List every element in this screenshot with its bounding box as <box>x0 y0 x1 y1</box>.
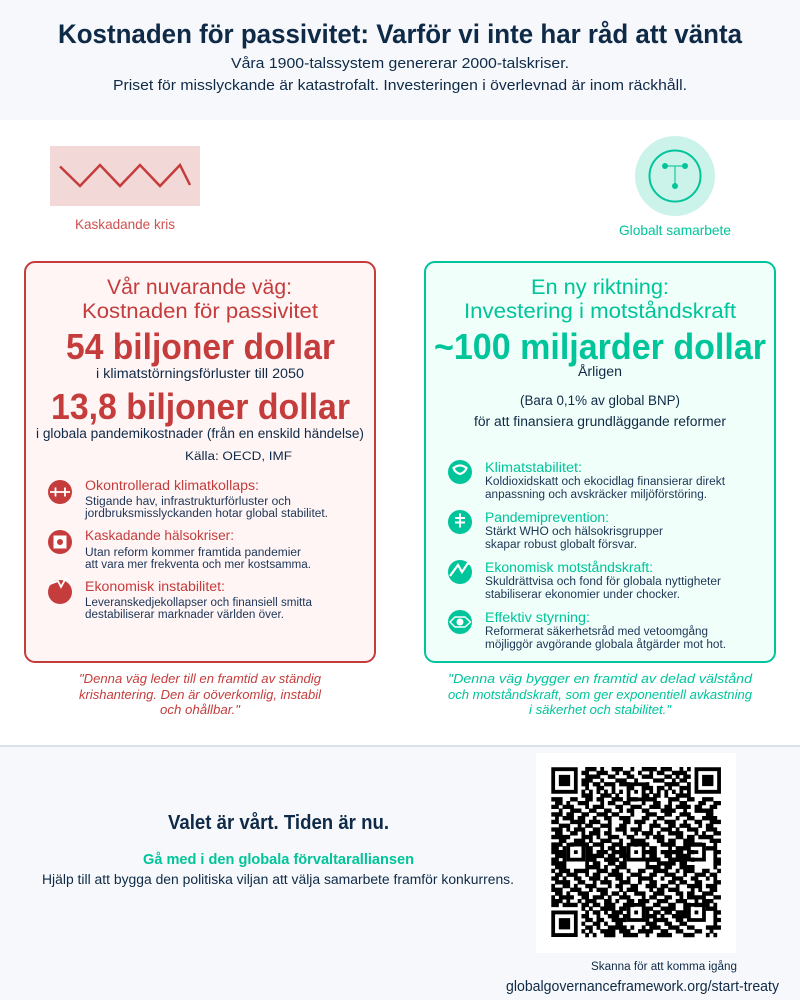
item: effective governance: möjliggör avgörande globala åtgärder mot hot. <box>485 639 726 651</box>
panel heading: Vår nuvarande väg: <box>107 276 292 299</box>
call to action text: Hjälp till att bygga den politiska viljan att välja samarbete framför konkurrens. <box>42 872 514 887</box>
figure: 13.8 trillion: 13,8 biljoner dollar <box>51 386 350 427</box>
quote: inaction <box>79 671 322 717</box>
header band <box>0 0 800 120</box>
icon: climate collapse <box>48 480 72 504</box>
panel heading: Kostnaden för passivitet <box>82 300 318 323</box>
quote: resilience <box>448 671 753 717</box>
item: economic resilience: Skuldrättvisa och fond för globala nyttigheter <box>485 576 721 588</box>
quote: inaction: krishantering. Den är oöverkomlig, instabil <box>79 687 322 702</box>
item: pandemic prevention: Pandemiprevention: <box>485 510 609 525</box>
item: climate collapse: Okontrollerad klimatkollaps: <box>85 478 259 493</box>
icon: economic instability <box>48 578 72 604</box>
item: economic resilience: stabiliserar ekonomier under chocker. <box>485 589 680 601</box>
panel heading: Investering i motståndskraft <box>464 300 736 323</box>
item: climate stability: Koldioxidskatt och ekocidlag finansierar direkt <box>485 476 726 488</box>
subtitle <box>113 55 687 94</box>
item: effective governance <box>448 610 726 651</box>
item: health crises: Kaskadande hälsokriser: <box>85 528 234 543</box>
QR code <box>536 753 736 953</box>
call to action heading: Valet är vårt. Tiden är nu. <box>168 811 389 834</box>
title: Kostnaden för passivitet: Varför vi inte har råd att vänta <box>58 19 743 49</box>
icon: cascading crisis <box>50 146 200 206</box>
item: climate stability: Klimatstabilitet: <box>485 460 582 475</box>
icon label: cascading crisis: Kaskadande kris <box>75 216 175 232</box>
subtitle: Våra 1900-talssystem genererar 2000-talskriser. <box>231 55 569 72</box>
item: effective governance: Reformerat säkerhetsråd med vetoomgång <box>485 626 708 638</box>
icon label: global cooperation: Globalt samarbete <box>619 222 731 238</box>
item: climate stability <box>448 460 726 501</box>
panel heading <box>464 276 736 323</box>
icon: global cooperation <box>635 136 715 216</box>
icon: economic resilience <box>448 560 472 584</box>
item: climate collapse: Stigande hav, infrastrukturförluster och <box>85 496 291 508</box>
item: pandemic prevention: Stärkt WHO och hälsokrisgrupper <box>485 526 663 538</box>
call to action link: Gå med i den globala förvaltaralliansen <box>143 851 414 868</box>
figure: 54 trillion: 54 biljoner dollar <box>66 326 335 367</box>
item: health crises: att vara mer frekventa och mer kostsamma. <box>85 559 311 571</box>
quote: inaction: och ohållbar." <box>160 702 241 717</box>
icon: effective governance <box>448 610 472 634</box>
item: economic instability <box>48 578 313 621</box>
icon: health crises <box>48 530 72 554</box>
panel: cost of inaction <box>25 262 375 662</box>
quote: resilience: i säkerhet och stabilitet." <box>529 702 672 717</box>
item: climate stability: anpassning och avskräcker miljöförstöring. <box>485 489 707 501</box>
item: economic resilience: Ekonomisk motståndskraft: <box>485 560 653 575</box>
figure caption: i klimatstörningsförluster till 2050 <box>96 366 304 381</box>
figure caption: i globala pandemikostnader (från en enskild händelse) <box>36 426 364 441</box>
panel heading <box>82 276 318 323</box>
source: Källa: OECD, IMF <box>185 451 292 463</box>
subtitle: Priset för misslyckande är katastrofalt. Investeringen i överlevnad är inom räckhåll. <box>113 77 687 94</box>
footer band <box>0 745 800 1000</box>
item: climate collapse <box>48 478 328 520</box>
item: pandemic prevention <box>448 510 663 551</box>
icon: pandemic prevention <box>448 510 472 534</box>
quote: resilience: och motståndskraft, som ger exponentiell avkastning <box>448 687 753 702</box>
item: economic instability: destabiliserar marknader världen över. <box>85 609 284 621</box>
item: health crises <box>48 528 311 571</box>
item: pandemic prevention: skapar robust globalt försvar. <box>485 539 637 551</box>
panel heading: En ny riktning: <box>531 276 669 299</box>
figure caption: Årligen <box>578 364 622 379</box>
item: effective governance: Effektiv styrning: <box>485 610 590 625</box>
quote: resilience: "Denna väg bygger en framtid av delad välstånd <box>448 671 753 686</box>
item: economic instability: Leveranskedjekollapser och finansiell smitta <box>85 597 313 609</box>
share of GDP note: (Bara 0,1% av global BNP) <box>520 393 680 408</box>
panel: new direction <box>425 262 775 662</box>
item: economic resilience <box>448 560 721 601</box>
purpose note: för att finansiera grundläggande reformer <box>474 414 727 429</box>
figure: 100 billion: ~100 miljarder dollar <box>434 326 766 367</box>
quote: inaction: "Denna väg leder till en framtid av ständig <box>79 671 322 686</box>
icon: climate stability <box>448 460 472 484</box>
item: climate collapse: jordbruksmisslyckanden hotar global stabilitet. <box>84 508 328 520</box>
QR caption: Skanna för att komma igång <box>591 961 737 973</box>
item: economic instability: Ekonomisk instabilitet: <box>85 579 225 594</box>
website URL: globalgovernanceframework.org/start-treaty <box>506 979 780 995</box>
item: health crises: Utan reform kommer framtida pandemier <box>85 547 301 559</box>
